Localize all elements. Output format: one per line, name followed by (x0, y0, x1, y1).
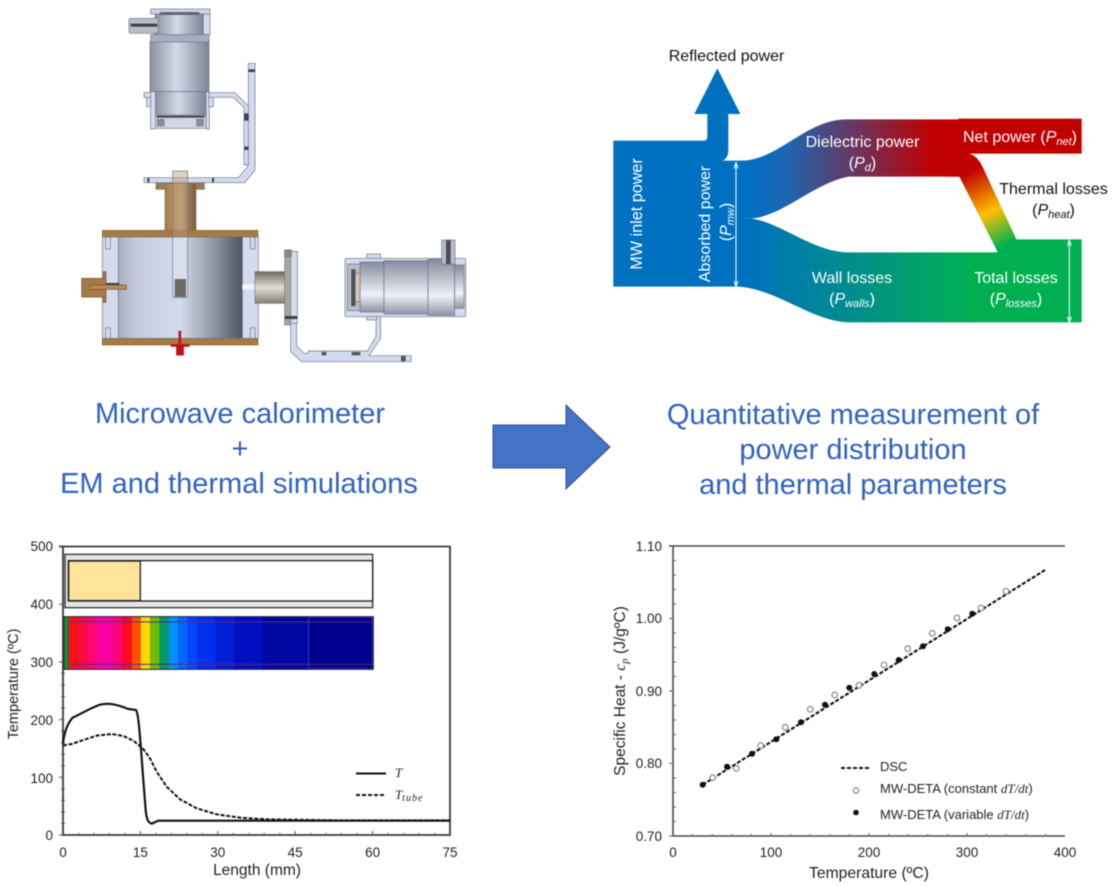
waveguide flange and side motor assembly (285, 240, 466, 362)
flow: inlet and reflected power (613, 68, 744, 287)
x axis tick labels: 100 (760, 845, 782, 860)
label: wall losses: ) (870, 291, 875, 308)
label: wall losses (812, 270, 892, 310)
heading: microwave calorimeter: Microwave calorimeter (95, 398, 385, 430)
flow: wall and total losses (740, 218, 1082, 322)
label: total losses: losses (1006, 298, 1037, 310)
label: wall losses: Wall losses (812, 270, 892, 287)
Sankey power flow diagram (613, 48, 1108, 322)
x axis tick labels: 400 (1054, 845, 1076, 860)
label: thermal losses: heat (1048, 209, 1070, 221)
x axis tick labels: 45 (288, 845, 303, 860)
label: total losses (974, 270, 1058, 310)
heading: quantitative measurement (667, 399, 1040, 501)
label: dielectric power: ) (871, 155, 876, 172)
label: total losses: Total losses (974, 270, 1058, 287)
microwave calorimeter CAD drawing (82, 9, 466, 362)
label: thermal losses: (P (1032, 202, 1048, 219)
label: net power: Net power (P (963, 129, 1056, 146)
label: thermal losses: ) (1070, 202, 1075, 219)
heading: quantitative measurement: Quantitative measurement of (667, 399, 1040, 431)
label: dielectric power (806, 134, 920, 174)
label: reflected power: Reflected power (669, 48, 785, 65)
label: dielectric power: (P (849, 155, 865, 172)
y axis tick labels: 300 (30, 655, 53, 670)
arrow: absorbed power span (734, 163, 738, 287)
open points: constant rate (710, 588, 1009, 780)
y axis tick labels: 1.00 (636, 611, 662, 626)
y axis tick labels: 0 (45, 828, 53, 843)
y axis title: Specific Heat - c (612, 664, 629, 776)
label: dielectric power: d (865, 162, 872, 174)
DSC dashed line (703, 570, 1045, 785)
legend: MW-DETA (variable dT/dt) (880, 807, 1029, 822)
legend: DSC (880, 759, 907, 774)
label: absorbed power: mw (725, 207, 737, 225)
label: total losses: ) (1037, 291, 1042, 308)
y axis tick labels: 1.10 (636, 539, 662, 554)
label: wall losses: walls (845, 298, 870, 310)
filled points: variable rate (700, 611, 975, 788)
x axis tick labels: 300 (956, 845, 978, 860)
legend (356, 765, 423, 804)
legend: tube (402, 793, 423, 804)
x axis tick labels: 60 (365, 845, 380, 860)
y axis tick labels (30, 539, 53, 843)
x axis tick labels (59, 845, 458, 860)
curve: T (63, 704, 450, 824)
inset: temperature field map (64, 617, 373, 669)
heading: microwave calorimeter: EM and thermal simulations (60, 468, 418, 500)
label: absorbed power: ) (718, 203, 735, 208)
top motor assembly (129, 9, 255, 183)
x axis tick labels: 15 (133, 845, 148, 860)
y axis tick labels: 100 (30, 771, 53, 786)
x axis title: Temperature (ºC) (809, 865, 929, 882)
y axis tick labels: 200 (30, 713, 53, 728)
heading: microwave calorimeter: + (232, 433, 248, 465)
y axis tick labels: 400 (30, 597, 53, 612)
axes and ticks (669, 546, 1065, 836)
label: thermal losses: Thermal losses (999, 181, 1108, 198)
y axis tick labels: 0.90 (636, 684, 662, 699)
y axis title: p (619, 658, 631, 665)
x axis tick labels: 200 (858, 845, 880, 860)
label: total losses: (P (990, 291, 1006, 308)
y axis tick labels: 0.80 (636, 756, 662, 771)
inset: geometry schematic (65, 554, 373, 608)
arrow: left to right (493, 405, 610, 489)
x axis tick labels: 30 (210, 845, 225, 860)
y axis tick labels (636, 539, 662, 844)
legend: MW-DETA (constant dT/dt) (880, 781, 1033, 796)
legend: T (395, 765, 403, 780)
flow: thermal losses (947, 154, 1017, 253)
legend (841, 759, 1033, 822)
y axis tick labels: 0.70 (636, 829, 662, 844)
y axis title: Temperature (ºC) (6, 629, 22, 739)
x axis tick labels: 0 (669, 845, 677, 860)
label: net power: net (1056, 136, 1073, 148)
heading: quantitative measurement: and thermal parameters (699, 469, 1007, 501)
label: absorbed power: (P (718, 225, 735, 241)
arrow: total losses span (1067, 240, 1071, 322)
heading: microwave calorimeter (60, 398, 418, 500)
curve: T tube (63, 734, 450, 820)
label: thermal losses (999, 181, 1108, 221)
chart: specific heat vs temperature (612, 539, 1076, 882)
x axis tick labels: 75 (442, 845, 458, 860)
axes and ticks (59, 546, 450, 835)
label: MW inlet power: MW inlet power (628, 158, 646, 270)
x axis title: Length (mm) (213, 862, 301, 879)
cavity body (82, 171, 292, 355)
flow: dielectric and net power (742, 119, 1082, 218)
x axis tick labels (669, 845, 1076, 860)
heading: quantitative measurement: power distribution (739, 434, 967, 466)
sankey flows (613, 68, 1082, 322)
label: absorbed power (697, 165, 737, 282)
legend: T (395, 787, 402, 802)
chart: temperature vs length (6, 539, 458, 879)
x axis tick labels: 0 (59, 845, 67, 860)
label: wall losses: (P (829, 291, 845, 308)
label: absorbed power: Absorbed power (697, 165, 714, 282)
y axis tick labels: 500 (30, 539, 53, 554)
y axis title: (J/gºC) (612, 606, 629, 658)
label: dielectric power: Dielectric power (806, 134, 920, 151)
label: net power: ) (1072, 129, 1077, 146)
